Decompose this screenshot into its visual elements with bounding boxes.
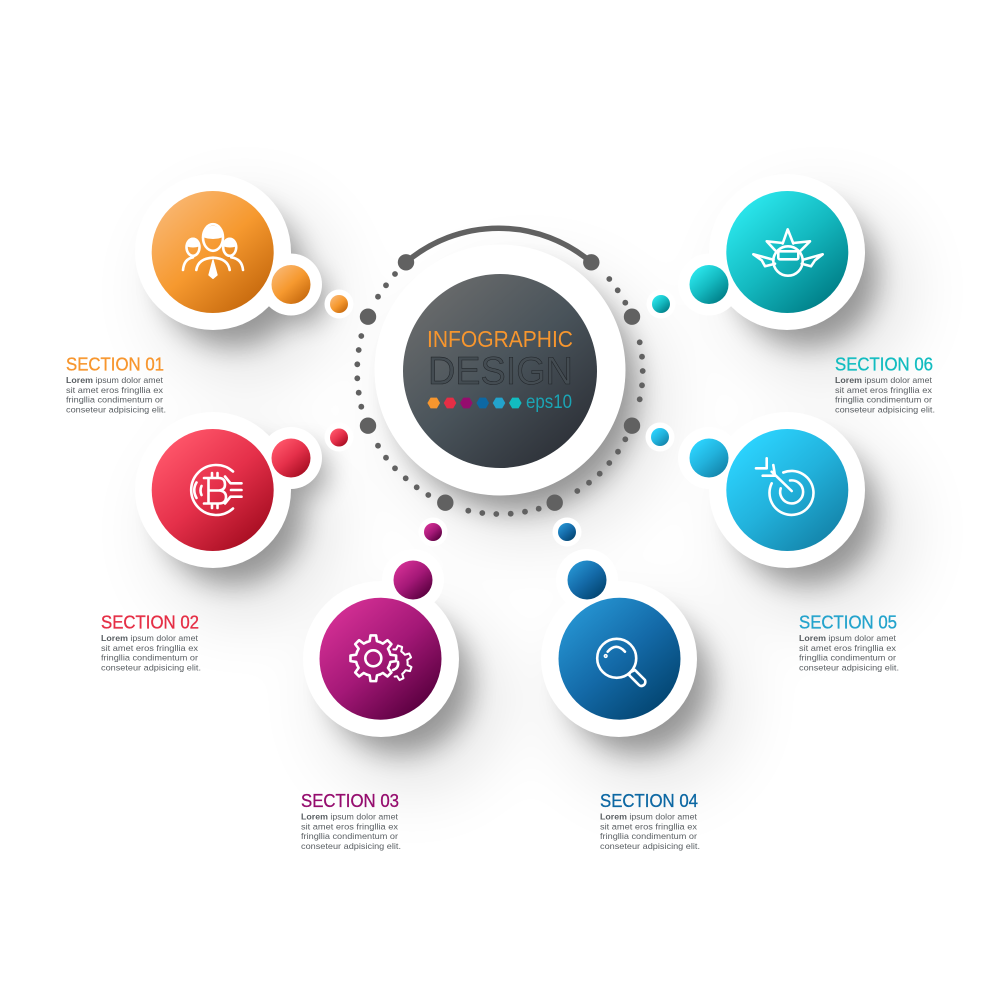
section 05 label: SECTION 05 xyxy=(799,612,897,632)
section 05 body: fringllia condimentum or xyxy=(799,652,896,662)
section 05 body: sit amet eros fringllia ex xyxy=(799,643,897,653)
icon: gears xyxy=(350,635,413,681)
section 03 body: conseteur adpisicing elit. xyxy=(301,841,401,851)
section 02 label: SECTION 02 xyxy=(101,612,199,632)
section 03 xyxy=(301,518,459,851)
section 06 body: Lorem ipsum dolor amet xyxy=(835,375,930,385)
section 03 body: fringllia condimentum or xyxy=(301,831,398,841)
section 02 body: Lorem ipsum dolor amet xyxy=(101,633,196,643)
icon: target with arrow xyxy=(756,458,813,515)
central hub ring of dots xyxy=(354,228,646,517)
section 05 body: Lorem ipsum dolor amet xyxy=(799,633,894,643)
icon: team with tie xyxy=(183,224,243,278)
section 05 body: conseteur adpisicing elit. xyxy=(799,662,899,672)
section 02 body: sit amet eros fringllia ex xyxy=(101,643,199,653)
section 03 label: SECTION 03 xyxy=(301,791,399,811)
section 04 body: conseteur adpisicing elit. xyxy=(600,841,700,851)
colour hexagons xyxy=(427,398,522,408)
section 01 xyxy=(66,174,354,414)
section 06 xyxy=(646,174,935,414)
section 01 label: SECTION 01 xyxy=(66,354,164,374)
version label: eps10 xyxy=(526,392,572,413)
section 02 xyxy=(101,412,354,672)
title: infographic: INFOGRAPHIC xyxy=(427,326,573,352)
icon: plane xyxy=(753,229,823,276)
title: design: DESIGN xyxy=(428,350,573,393)
section 06 body: sit amet eros fringllia ex xyxy=(835,385,933,395)
section 04 body: sit amet eros fringllia ex xyxy=(600,821,698,831)
icon: magnifier xyxy=(597,639,645,686)
section 06 label: SECTION 06 xyxy=(835,354,933,374)
section 03 body: Lorem ipsum dolor amet xyxy=(301,812,396,822)
section 02 body: fringllia condimentum or xyxy=(101,652,198,662)
section 01 body: conseteur adpisicing elit. xyxy=(66,404,166,414)
section 04 label: SECTION 04 xyxy=(600,791,698,811)
section 01 body: Lorem ipsum dolor amet xyxy=(66,375,161,385)
icon: bitcoin xyxy=(191,465,242,515)
arc above hub xyxy=(406,228,591,262)
section 03 body: sit amet eros fringllia ex xyxy=(301,821,399,831)
section 01 body: fringllia condimentum or xyxy=(66,394,163,404)
section 05 xyxy=(646,412,899,672)
central hub xyxy=(374,244,626,496)
section 02 body: conseteur adpisicing elit. xyxy=(101,662,201,672)
section 06 body: conseteur adpisicing elit. xyxy=(835,404,935,414)
section 04 xyxy=(541,518,700,851)
section 04 body: Lorem ipsum dolor amet xyxy=(600,812,695,822)
section 04 body: fringllia condimentum or xyxy=(600,831,697,841)
section 01 body: sit amet eros fringllia ex xyxy=(66,385,164,395)
section 06 body: fringllia condimentum or xyxy=(835,394,932,404)
